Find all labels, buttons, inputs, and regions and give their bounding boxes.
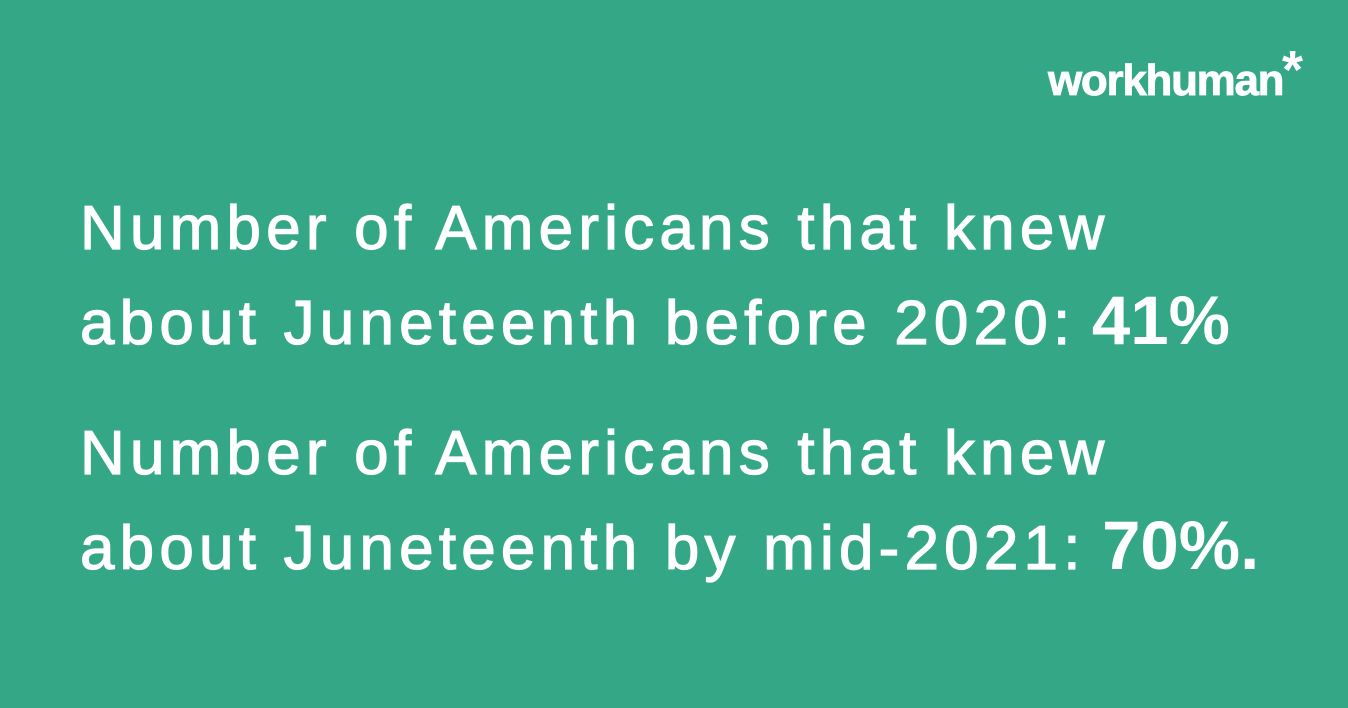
text block: before 2020 stat: Number of Americans that knew [80,194,1110,263]
text block: before 2020 stat [80,194,1230,359]
text block: mid-2021 stat [80,419,1259,584]
text block: before 2020 stat: about Juneteenth before 2020: 41% [80,282,1230,359]
text block: mid-2021 stat: Number of Americans that knew [80,419,1110,488]
logo: workhuman [1047,40,1303,105]
logo: workhuman: * [1282,40,1303,100]
text block: mid-2021 stat: about Juneteenth by mid-2021: 70%. [80,507,1259,584]
logo: workhuman: workhuman [1048,56,1283,105]
